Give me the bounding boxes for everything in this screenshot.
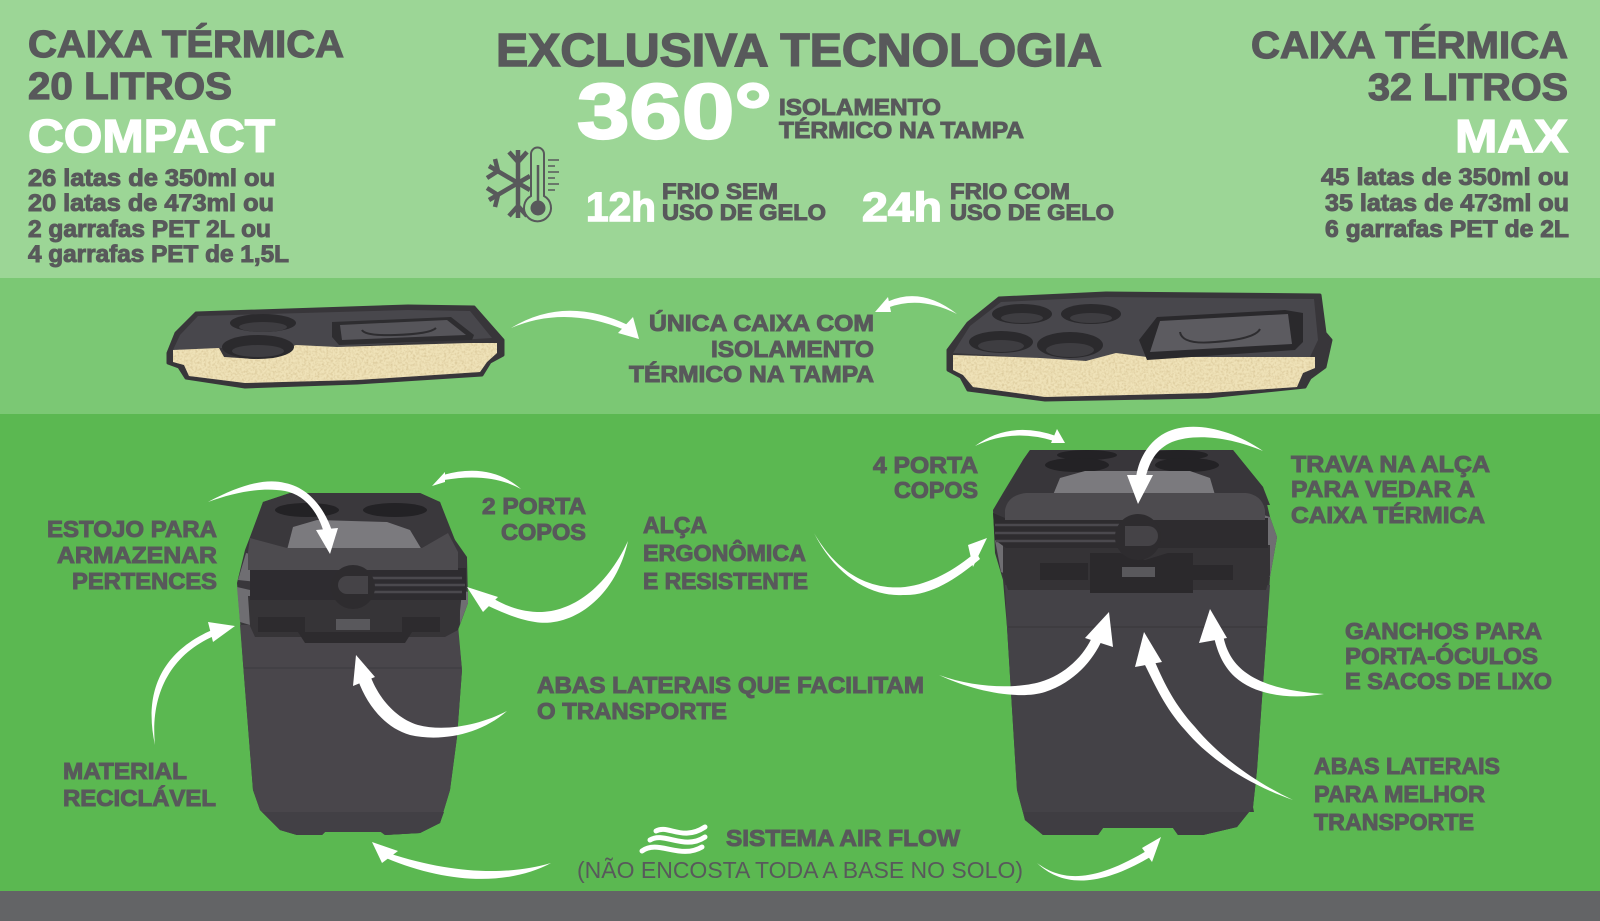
label: 4 cup holders [873, 452, 978, 503]
text block: max capacity: 35 latas de 473ml ou [1325, 190, 1569, 217]
label: handle lock: CAIXA TÉRMICA [1291, 501, 1485, 528]
label: recyclable material: MATERIAL [63, 758, 187, 784]
label: ergonomic handle [643, 512, 808, 594]
heading: max model: 32 LITROS [1368, 67, 1568, 109]
stat: 12h cold without ice: 12h [586, 184, 656, 230]
arrow: handle to max [814, 533, 987, 595]
arrow: storage case [208, 481, 338, 554]
label: ergonomic handle: ALÇA [643, 512, 707, 538]
arrow: to lid label from compact lid [511, 311, 639, 339]
label: 2 cup holders [482, 493, 586, 545]
text block: compact capacity: 2 garrafas PET 2L ou [28, 216, 271, 243]
cooler: compact 20 litres [237, 493, 468, 835]
stat: 24h cold with ice: USO DE GELO [950, 200, 1114, 225]
label: side tabs: ABAS LATERAIS QUE FACILITAM [537, 672, 924, 698]
arrow: to lid label from max lid [875, 296, 957, 314]
icon: air flow waves [642, 827, 705, 851]
label: air flow system: SISTEMA AIR FLOW [726, 825, 960, 851]
arrow: handle lock [1127, 427, 1263, 504]
label: handle lock: PARA VEDAR A [1291, 476, 1475, 502]
label: 4 cup holders: 4 PORTA [873, 452, 978, 478]
icon: snowflake and thermometer [487, 148, 559, 221]
stat: 24h cold with ice: FRIO COM [950, 179, 1070, 204]
text block: max capacity: 6 garrafas PET de 2L [1325, 216, 1569, 243]
label: ergonomic handle: E RESISTENTE [643, 568, 808, 594]
text block: max capacity [1321, 164, 1569, 243]
label: hooks: GANCHOS PARA [1345, 618, 1542, 644]
text block: max capacity: 45 latas de 350ml ou [1321, 164, 1569, 191]
heading: compact model: 20 LITROS [28, 66, 232, 108]
stat: 24h cold with ice [862, 179, 1114, 230]
title: exclusive technology: TÉRMICO NA TAMPA [779, 116, 1024, 143]
label: air flow system [577, 825, 1023, 883]
label: recyclable material: RECICLÁVEL [63, 784, 216, 811]
text block: compact capacity: 4 garrafas PET de 1,5L [28, 241, 289, 268]
arrow: handle to compact [467, 541, 628, 623]
stat: 12h cold without ice: USO DE GELO [662, 200, 826, 225]
label: side tabs: O TRANSPORTE [537, 698, 727, 724]
arrow: 2 cup holders [432, 471, 521, 489]
label: storage case [47, 516, 217, 594]
text block: compact capacity: 20 latas de 473ml ou [28, 190, 274, 217]
label: hooks: PORTA-ÓCULOS [1345, 642, 1538, 669]
title: exclusive technology: 360° [577, 67, 772, 155]
arrow: hooks [1199, 609, 1324, 696]
arrow: 4 cup holders [975, 429, 1065, 446]
text block: only box with lid insulation: ÚNICA CAIXA COM [649, 309, 874, 336]
stat: 12h cold without ice [586, 179, 826, 230]
label: air flow system: (NÃO ENCOSTA TODA A BASE NO SOLO) [577, 857, 1023, 883]
heading: compact model: COMPACT [28, 110, 275, 162]
label: hooks: E SACOS DE LIXO [1345, 668, 1552, 694]
lid cutaway: compact [165, 306, 505, 387]
label: side tabs max: TRANSPORTE [1314, 809, 1474, 835]
stat: 12h cold without ice: FRIO SEM [662, 179, 778, 204]
arrow: side tabs to max [939, 612, 1113, 695]
text block: compact capacity: 26 latas de 350ml ou [28, 165, 275, 192]
text block: compact capacity [28, 165, 289, 268]
label: ergonomic handle: ERGONÔMICA [643, 539, 806, 566]
arrow: side tabs label to max [1135, 632, 1293, 800]
label: 2 cup holders: 2 PORTA [482, 493, 586, 519]
stat: 24h cold with ice: 24h [862, 184, 942, 230]
title: exclusive technology: ISOLAMENTO [779, 94, 941, 120]
lid cutaway: max [945, 293, 1331, 400]
arrow: air flow to compact [372, 842, 551, 879]
footer bar [0, 891, 1600, 921]
label: side tabs max [1314, 753, 1500, 835]
heading: compact model [28, 22, 344, 162]
label: handle lock [1291, 451, 1490, 528]
label: storage case: ESTOJO PARA [47, 516, 217, 542]
panel: top band [0, 0, 1600, 278]
label: side tabs [537, 672, 924, 724]
text block: only box with lid insulation: ISOLAMENTO [711, 336, 874, 362]
title: exclusive technology: EXCLUSIVA TECNOLOGIA [496, 24, 1102, 76]
label: handle lock: TRAVA NA ALÇA [1291, 451, 1490, 477]
heading: max model [1251, 23, 1568, 162]
label: side tabs max: PARA MELHOR [1314, 781, 1485, 807]
label: storage case: ARMAZENAR [57, 542, 217, 568]
heading: compact model: CAIXA TÉRMICA [28, 22, 344, 66]
arrow: air flow to max [1037, 837, 1161, 881]
label: storage case: PERTENCES [72, 568, 217, 594]
label: hooks [1345, 618, 1552, 694]
arrow: side tabs to compact [353, 655, 507, 738]
text block: only box with lid insulation [629, 309, 874, 387]
label: 4 cup holders: COPOS [894, 477, 978, 503]
label: side tabs max: ABAS LATERAIS [1314, 753, 1500, 779]
title: exclusive technology [496, 24, 1102, 155]
text block: only box with lid insulation: TÉRMICO NA TAMPA [629, 360, 874, 387]
arrow: recyclable material [152, 622, 235, 745]
heading: max model: CAIXA TÉRMICA [1251, 23, 1568, 67]
cooler: max 32 litres [993, 450, 1277, 835]
panel: features band [0, 414, 1600, 891]
label: recyclable material [63, 758, 216, 811]
label: 2 cup holders: COPOS [501, 519, 586, 545]
panel: lid band [0, 278, 1600, 414]
heading: max model: MAX [1455, 110, 1568, 162]
